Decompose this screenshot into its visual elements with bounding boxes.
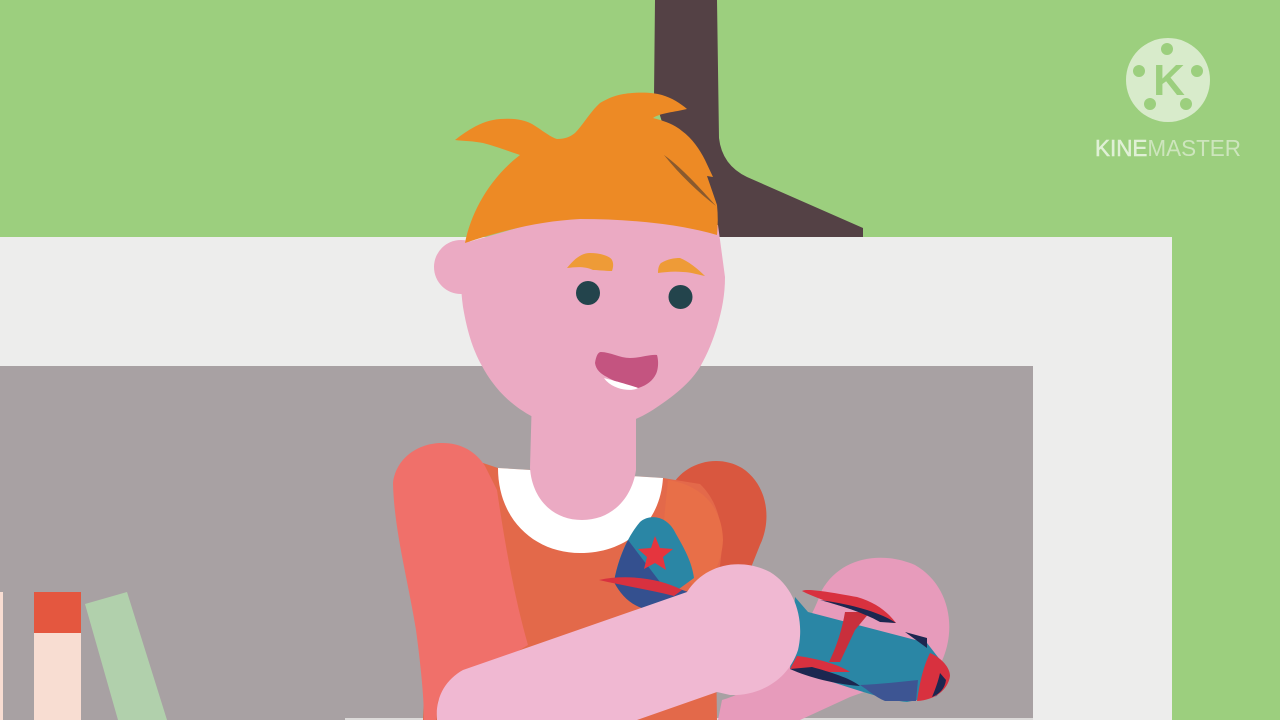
rocket body <box>790 597 948 702</box>
upper wing shade <box>820 600 896 623</box>
nose tip <box>932 673 946 697</box>
far sleeve <box>670 461 766 590</box>
rocket nose <box>917 653 950 701</box>
lower wing <box>790 656 850 672</box>
book: red and cream <box>34 592 81 720</box>
orange shirt fold <box>660 480 723 590</box>
window frame <box>0 237 1172 720</box>
upper wing <box>802 590 896 623</box>
logo disc <box>1126 38 1210 122</box>
shelf lower edge <box>345 718 1033 720</box>
near sleeve <box>393 443 528 720</box>
neck <box>530 395 636 520</box>
hair <box>455 93 718 243</box>
mouth <box>595 352 658 388</box>
left eye <box>576 281 600 305</box>
near arm and hand <box>437 564 800 720</box>
collar <box>498 468 663 553</box>
far hand behind rocket <box>718 558 949 720</box>
tree trunk <box>654 0 863 237</box>
head <box>461 210 725 428</box>
strut <box>829 612 870 662</box>
book: pale sliver <box>0 592 3 720</box>
logo disc: K <box>1153 56 1185 105</box>
character <box>393 93 950 720</box>
KineMaster watermark <box>1095 38 1241 161</box>
teeth <box>604 378 638 390</box>
tail star <box>638 536 673 570</box>
left eyebrow <box>567 253 613 271</box>
book: tilted green <box>85 592 167 720</box>
books <box>0 592 167 720</box>
body top edge <box>905 632 927 648</box>
hair strand <box>664 155 716 206</box>
body shadow <box>860 680 918 701</box>
right eye <box>668 285 692 309</box>
grey shelf panel <box>0 366 1033 720</box>
tail wing <box>599 577 682 596</box>
tail fin <box>614 517 694 610</box>
lower wing shade <box>790 667 860 686</box>
rocket toy <box>599 517 950 702</box>
ear <box>434 240 488 294</box>
tail shadow <box>614 540 688 610</box>
wordmark: KINEMASTER <box>1095 135 1241 161</box>
torso <box>423 463 722 720</box>
right eyebrow <box>658 258 705 276</box>
